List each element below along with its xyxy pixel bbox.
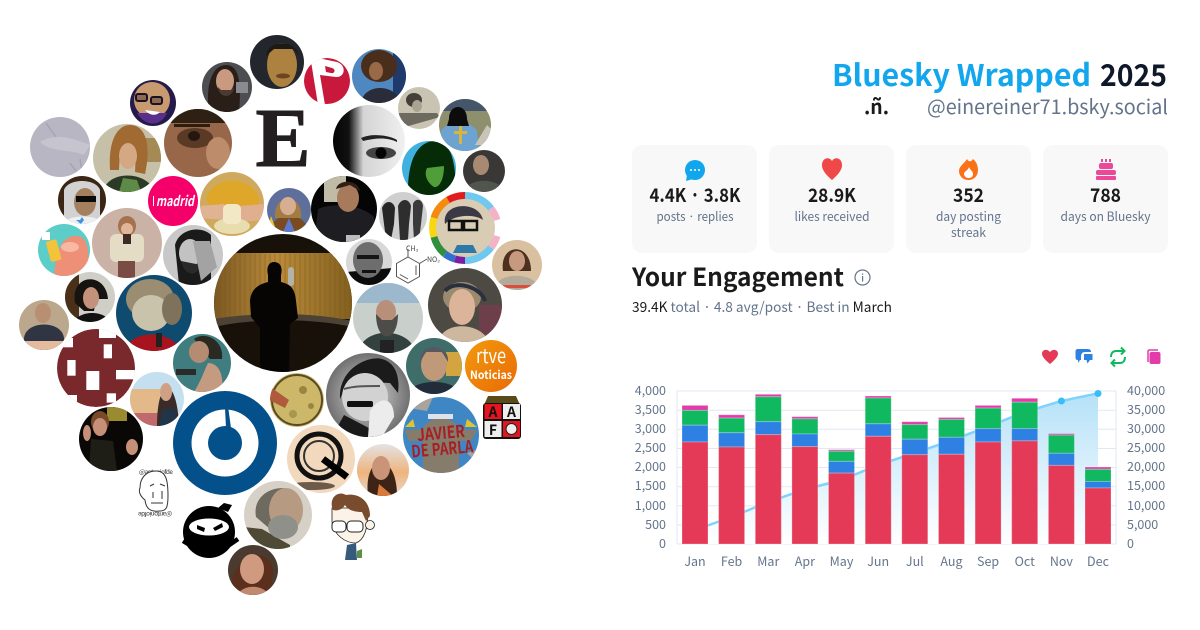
stat card: likes received: likes received bbox=[794, 206, 870, 225]
y axis right labels: 40,000 bbox=[1127, 380, 1165, 399]
icon: flame bbox=[959, 159, 978, 180]
avatar: performer at microphone bbox=[79, 407, 143, 471]
avatar: dog-headed person bbox=[352, 49, 406, 103]
icon: nitrotoluene molecule: CH₃ bbox=[406, 244, 419, 254]
avatar: woman with gun painting bbox=[173, 334, 231, 392]
avatar: woman with glasses resting bbox=[492, 240, 542, 290]
illustration: ninja bbox=[183, 503, 238, 558]
bar: May bbox=[828, 450, 854, 544]
bar: Apr bbox=[792, 417, 818, 544]
header title: Bluesky Wrapped bbox=[832, 51, 1091, 95]
logo: letter Q magnifier bbox=[287, 425, 355, 493]
y axis right labels: 0 bbox=[1127, 533, 1134, 552]
avatar: woman with sunset background bbox=[357, 444, 409, 496]
icon: speech bubble bbox=[685, 160, 705, 181]
logo: Javier de Parla mummy: JAVIER bbox=[416, 417, 466, 446]
y axis left labels: 4,000 bbox=[635, 380, 666, 399]
bar: Oct bbox=[1012, 398, 1038, 544]
avatar: man with sunglasses and veil bbox=[58, 176, 106, 224]
stat card: posts and replies: 4.4K · 3.8K bbox=[650, 181, 741, 208]
avatar: black and white walking group bbox=[379, 192, 427, 240]
x axis month labels: Jan bbox=[684, 551, 706, 570]
avatar: man with glasses, purple bbox=[130, 80, 176, 126]
avatar: child portrait on blue bbox=[116, 275, 192, 351]
avatar: man covering face, black and white bbox=[163, 225, 223, 285]
stat card: day posting streak bbox=[906, 145, 1031, 253]
cumulative area bbox=[695, 390, 1102, 544]
illustration: cartoon man with glasses bbox=[332, 493, 374, 560]
header title: 2025 bbox=[1100, 51, 1167, 95]
stat card: day posting streak: streak bbox=[951, 222, 986, 241]
user handle: @einereiner71.bsky.social bbox=[927, 91, 1168, 120]
user handle: .ñ. bbox=[864, 91, 889, 120]
avatar: black and white man bbox=[346, 239, 392, 285]
stat card: likes received bbox=[769, 145, 894, 253]
avatar: vintage child photo bbox=[92, 208, 162, 278]
avatar: Jane Austen portrait bbox=[428, 268, 502, 342]
x axis month labels: Dec bbox=[1087, 551, 1110, 570]
avatar: woman with dark hair bbox=[228, 545, 278, 595]
avatar: man at night bbox=[250, 35, 304, 89]
icon: nitrotoluene molecule bbox=[396, 244, 440, 283]
y axis left labels: 2,500 bbox=[635, 437, 666, 456]
x axis month labels: Aug bbox=[940, 551, 963, 570]
avatar: moon illustration bbox=[269, 373, 324, 427]
y axis right labels: 30,000 bbox=[1127, 418, 1165, 437]
x axis month labels: Oct bbox=[1015, 551, 1035, 570]
x axis month labels: Nov bbox=[1050, 551, 1073, 570]
logo: blue ring bbox=[173, 391, 277, 495]
logo: AAFO crest: A bbox=[488, 402, 499, 422]
avatar: pale grey sketch bbox=[30, 117, 90, 177]
logo: rtve Noticias bbox=[465, 340, 517, 392]
avatar: man in dark shirt bbox=[463, 150, 505, 192]
x axis month labels: Jul bbox=[906, 551, 924, 570]
bar: Jan bbox=[682, 405, 708, 544]
logo: AAFO crest: A bbox=[506, 402, 517, 422]
bar: Nov bbox=[1048, 434, 1074, 544]
avatar: woman on balcony bbox=[130, 372, 184, 426]
y axis right labels: 25,000 bbox=[1127, 437, 1165, 456]
logo: madrid bbox=[148, 176, 198, 226]
y axis left labels: 0 bbox=[659, 533, 666, 552]
logo: AAFO crest: F bbox=[489, 420, 497, 440]
avatar: man with grey hair and pencil bbox=[406, 338, 462, 394]
x axis month labels: May bbox=[830, 551, 854, 570]
stat card: days on Bluesky: 788 bbox=[1090, 181, 1121, 208]
y axis left labels: 1,000 bbox=[635, 495, 666, 514]
engagement summary: 39.4K total · 4.8 avg/post · Best in March bbox=[632, 297, 892, 317]
legend icon: replies bubbles bbox=[1076, 349, 1092, 364]
x axis month labels: Jun bbox=[867, 551, 889, 570]
y axis left labels: 500 bbox=[645, 514, 666, 533]
bar: Dec bbox=[1085, 467, 1111, 544]
legend icon: likes heart bbox=[1042, 350, 1058, 364]
logo: El Pais E: E bbox=[256, 92, 310, 185]
y axis right labels: 10,000 bbox=[1127, 495, 1165, 514]
stat card: likes received: 28.9K bbox=[808, 181, 857, 208]
x axis month labels: Sep bbox=[977, 551, 999, 570]
y axis left labels bbox=[635, 380, 666, 552]
y axis left labels: 2,000 bbox=[635, 456, 666, 475]
avatar: close-up of eye bbox=[164, 109, 232, 177]
avatar: black and white eye bbox=[333, 105, 405, 177]
logo: rtve Noticias: rtve bbox=[476, 340, 506, 369]
logo: rtve Noticias: Noticias bbox=[470, 367, 512, 383]
bar: Aug bbox=[938, 418, 964, 544]
logo: AAFO crest bbox=[483, 396, 521, 440]
avatar: bald man with grey beard bbox=[244, 481, 312, 549]
illustration: sketch of a face with handle text bbox=[138, 466, 173, 520]
icon: info bbox=[855, 270, 870, 285]
icon: nitrotoluene molecule: NO₂ bbox=[427, 255, 440, 265]
stat card: day posting streak: 352 bbox=[953, 181, 984, 208]
y axis right labels: 5,000 bbox=[1127, 514, 1158, 533]
avatar: long-haired rocker bbox=[93, 124, 161, 192]
avatar: woman with curly hair bbox=[65, 272, 115, 322]
stat card: day posting streak: day posting bbox=[936, 206, 1001, 225]
y axis left labels: 1,500 bbox=[635, 475, 666, 494]
avatar: red P logo bbox=[304, 58, 350, 104]
x axis month labels: Mar bbox=[757, 551, 779, 570]
avatar: silhouette against wooden wall bbox=[214, 234, 352, 372]
y axis right labels: 35,000 bbox=[1127, 399, 1165, 418]
bar: Jun bbox=[865, 396, 891, 544]
avatar: hands with teacup bbox=[200, 172, 264, 236]
engagement chart bbox=[635, 380, 1165, 570]
avatar: long-bearded man with glasses bbox=[353, 283, 423, 353]
avatar: green hooded figure bbox=[402, 141, 456, 195]
illustration: sketch of a face with handle text: @antoniofde bbox=[138, 510, 172, 520]
stat card: posts and replies bbox=[632, 145, 757, 253]
chart legend bbox=[1042, 348, 1160, 366]
logo: madrid: madrid bbox=[156, 191, 195, 211]
y axis left labels: 3,500 bbox=[635, 399, 666, 418]
y axis right labels bbox=[1127, 380, 1165, 552]
stat card: days on Bluesky bbox=[1043, 145, 1168, 253]
avatar: blonde woman with blue top bbox=[267, 188, 311, 232]
engagement heading: Your Engagement bbox=[631, 258, 844, 294]
avatar: Groucho Marx portrait bbox=[326, 353, 410, 437]
illustration: sketch of a face with handle text: @antoniofde bbox=[139, 466, 173, 476]
logo: Javier de Parla mummy bbox=[403, 397, 479, 473]
stat card: posts and replies: posts · replies bbox=[656, 206, 734, 225]
avatar: rainbow ring caricature bbox=[429, 192, 501, 264]
legend icon: reposts arrows bbox=[1111, 348, 1125, 366]
avatar: man in black shirt bbox=[311, 176, 377, 242]
avatar: grey woman bbox=[398, 87, 440, 129]
y axis right labels: 15,000 bbox=[1127, 475, 1165, 494]
bar: Mar bbox=[755, 394, 781, 544]
x axis month labels: Feb bbox=[721, 551, 743, 570]
x axis month labels: Apr bbox=[795, 551, 815, 570]
y axis left labels: 3,000 bbox=[635, 418, 666, 437]
stacked bars by month bbox=[682, 394, 1111, 544]
avatar: Darth Vader mask person bbox=[439, 99, 491, 151]
logo: maroon pixel disc bbox=[57, 328, 136, 408]
y axis right labels: 20,000 bbox=[1127, 456, 1165, 475]
avatar: man in grey t-shirt at table bbox=[19, 300, 69, 350]
stat card: days on Bluesky: days on Bluesky bbox=[1060, 206, 1151, 225]
x axis month labels bbox=[684, 551, 1110, 570]
bar: Jul bbox=[902, 422, 928, 544]
bar: Feb bbox=[719, 415, 745, 544]
legend icon: quotes squares bbox=[1148, 350, 1160, 364]
logo: Javier de Parla mummy: DE PARLA bbox=[410, 432, 474, 463]
icon: birthday cake bbox=[1096, 159, 1116, 180]
avatar cluster bbox=[19, 35, 542, 595]
avatar: bearded man with camera bbox=[202, 62, 252, 112]
avatar: otter selfie illustration bbox=[38, 224, 90, 276]
icon: heart bbox=[822, 158, 842, 180]
bar: Sep bbox=[975, 405, 1001, 544]
